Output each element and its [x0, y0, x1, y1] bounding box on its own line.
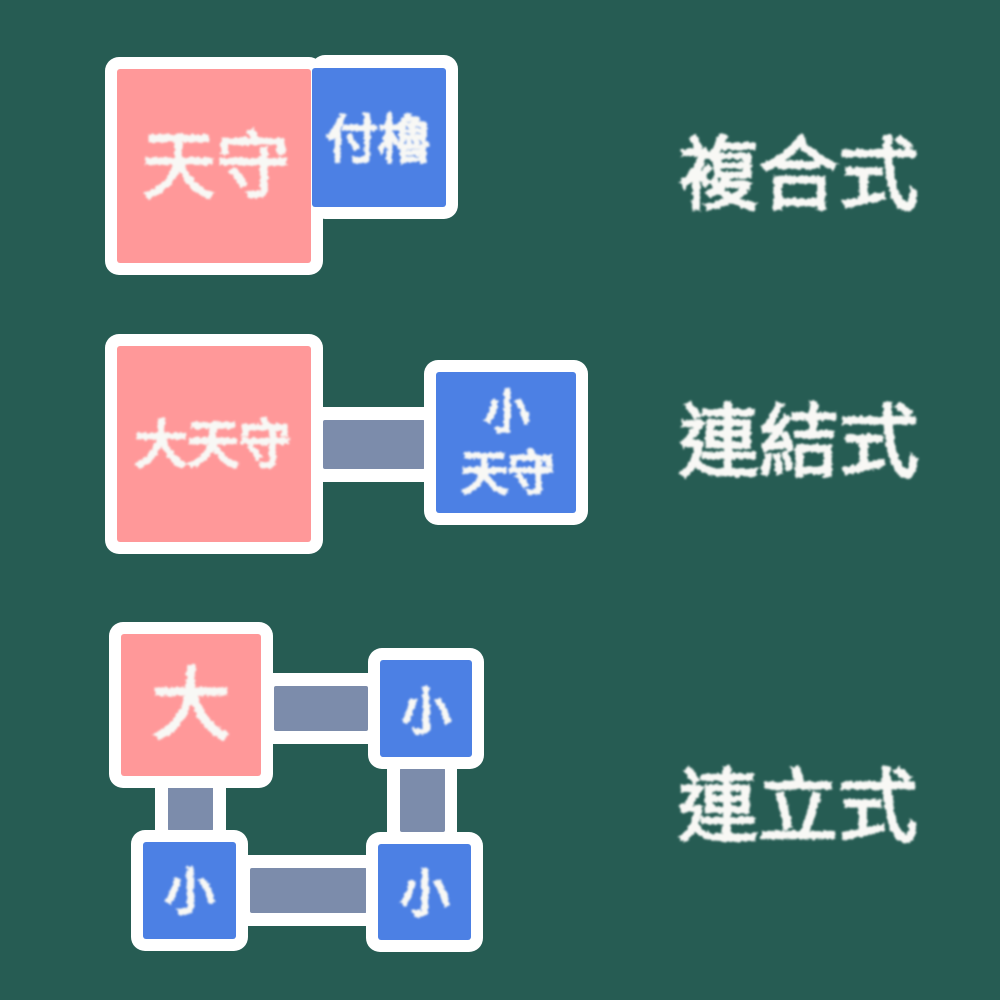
- corridor: [315, 407, 435, 482]
- tower: main keep: 天守: [142, 125, 290, 208]
- corridor: bottom: [240, 855, 374, 926]
- label: linked type: 連立式: [678, 763, 918, 852]
- tower: small bottom right: 小: [400, 866, 450, 922]
- tower: small top right: [368, 648, 484, 769]
- tower: large: [109, 622, 273, 788]
- tower: small keep: 天守: [461, 447, 555, 500]
- tower: small turret: 付櫓: [326, 112, 430, 170]
- tower: main keep: [105, 57, 323, 275]
- tower: large keep: 大天守: [135, 417, 291, 475]
- corridor: right: [387, 762, 457, 838]
- tower: large keep: [105, 334, 323, 554]
- tower: small top right: 小: [401, 684, 451, 740]
- diagram: connected type: [105, 334, 588, 554]
- diagram: compound type: [105, 55, 458, 275]
- tower: large: 大: [151, 661, 231, 750]
- tower: small bottom right: [366, 832, 483, 952]
- corridor: top: [265, 673, 375, 744]
- corridor: left: [155, 780, 226, 838]
- tower: small bottom left: 小: [165, 864, 215, 920]
- tower: small keep: 小: [484, 386, 530, 438]
- label: connected type: 連結式: [679, 398, 919, 487]
- diagram: linked type: [109, 622, 484, 952]
- tower: small bottom left: [131, 830, 248, 951]
- tower: small keep: [424, 360, 588, 525]
- label: compound type: 複合式: [679, 131, 919, 220]
- tower: small turret: [311, 55, 458, 219]
